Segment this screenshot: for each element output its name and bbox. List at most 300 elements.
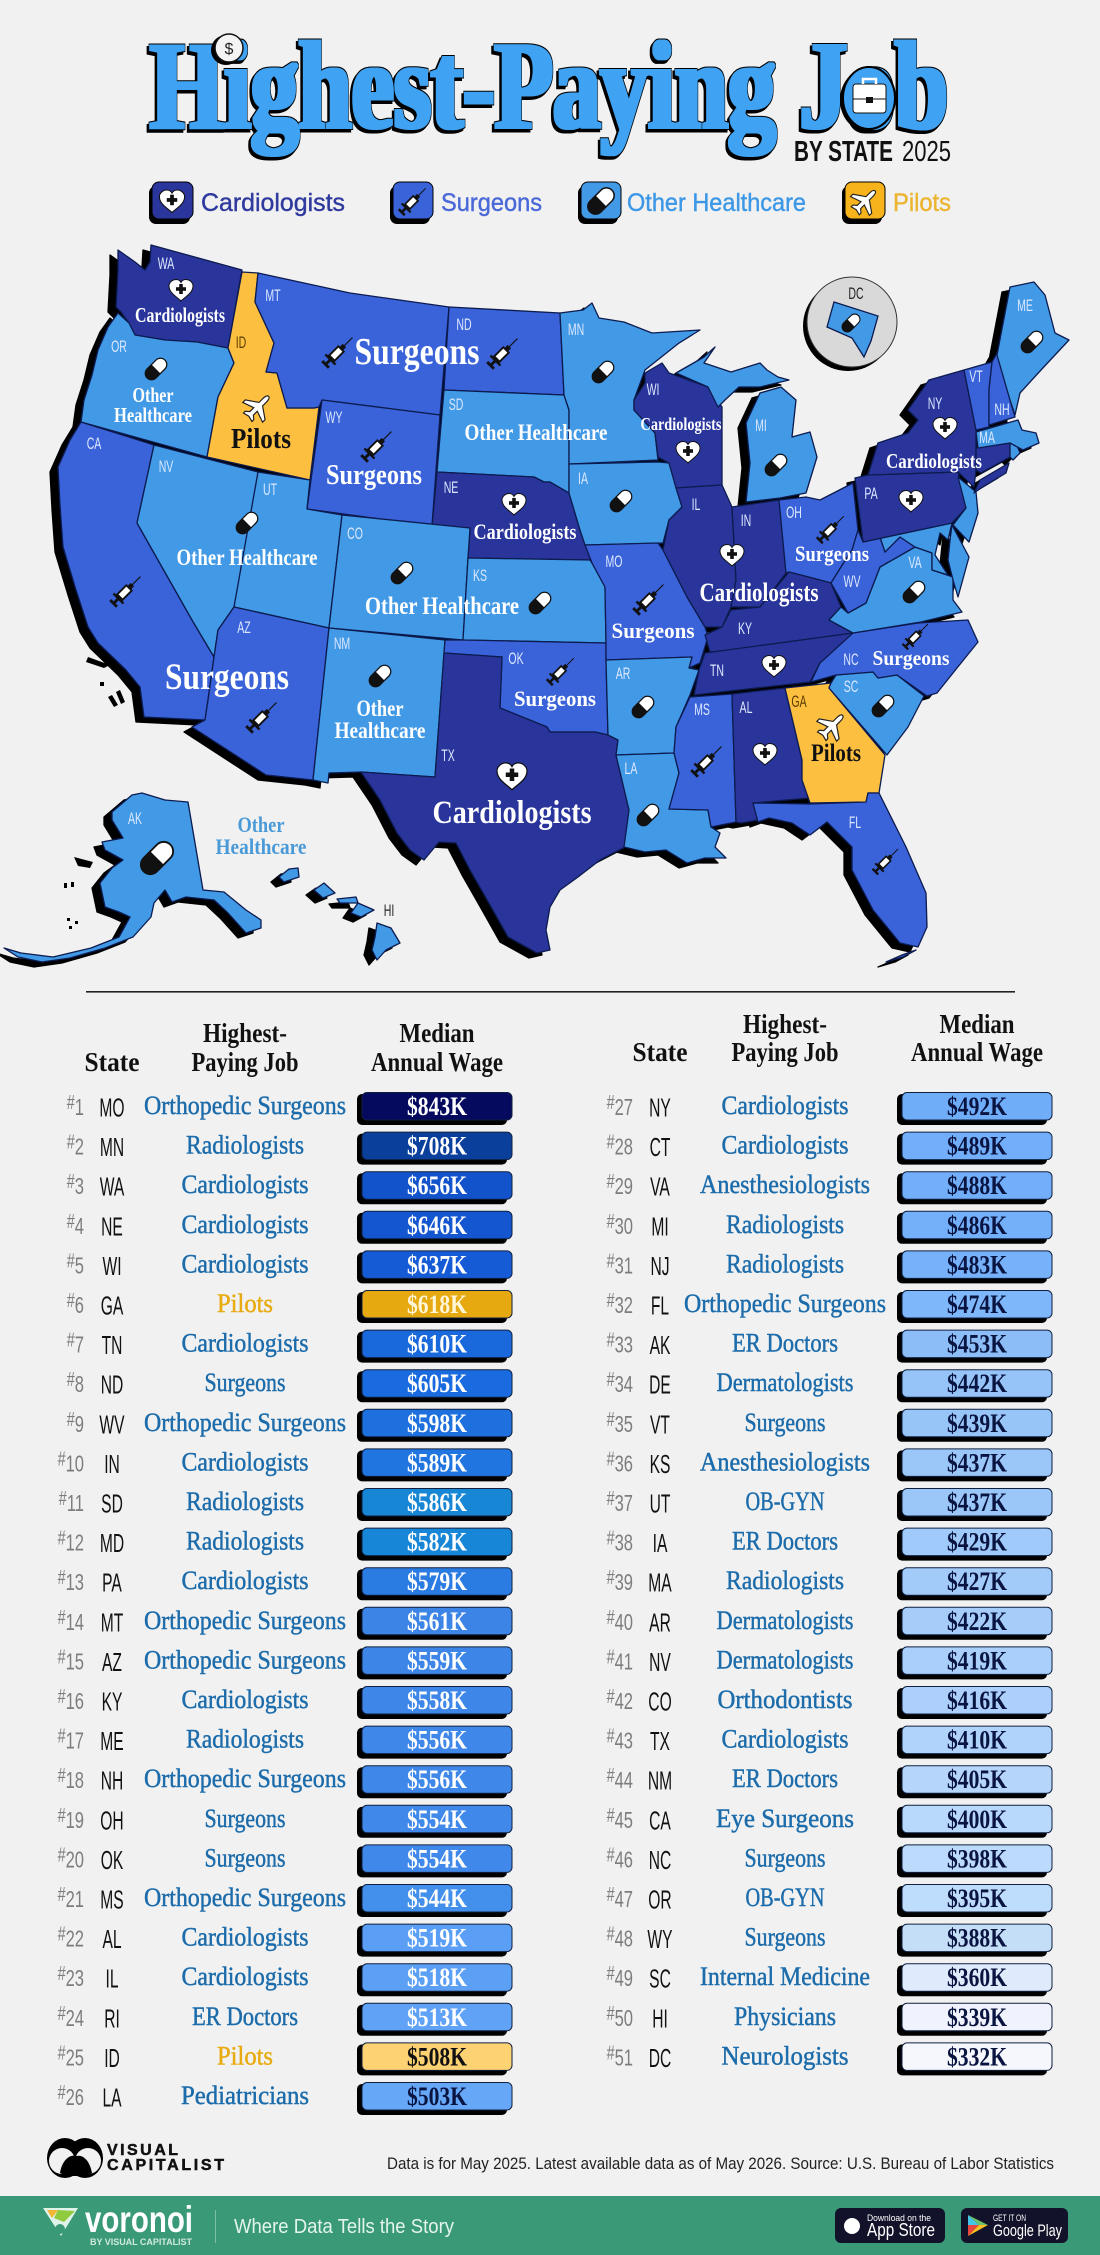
row 1 [67,1091,512,1125]
row 2: MN [100,1133,124,1162]
table headers: left: Paying Job [192,1047,298,1077]
row 7 [67,1328,512,1363]
row 42: # [607,1685,615,1708]
map job labels: Other Healthcare [365,593,519,620]
table headers: right: State [632,1037,688,1067]
row 12: # [58,1526,66,1549]
row 21: # [58,1883,66,1906]
row 5: $637K [407,1250,468,1279]
map state abbreviations: CO [347,523,363,543]
state: CA [58,422,214,720]
row 51 [607,2041,1052,2075]
row 5: 5 [75,1254,84,1279]
state: SC [829,672,924,755]
legend [149,182,951,224]
row 33: # [607,1328,615,1351]
row 36: Anesthesiologists [700,1447,870,1476]
row 23: # [58,1962,66,1985]
row 24: $513K [407,2003,468,2032]
map job labels: Pilots [811,740,861,767]
map state abbreviations: CA [87,433,102,453]
row 49: # [607,1962,615,1985]
row 35: # [607,1407,615,1430]
legend item: Surgeons: Surgeons [441,189,542,217]
row 40: AR [649,1608,671,1637]
row 18: NH [101,1767,123,1796]
map job labels: Surgeons [165,657,289,698]
row 1: MO [99,1093,125,1123]
row 30: $486K [947,1211,1008,1240]
row 5: Cardiologists [182,1249,308,1278]
table headers: left [84,1018,503,1077]
row 50: Physicians [734,2002,836,2031]
row 49: $360K [947,1963,1008,1992]
map job labels: Pilots [231,424,291,455]
row 31: Radiologists [726,1249,844,1278]
row 41: # [607,1645,615,1668]
row 8: # [67,1368,75,1391]
state: MO [585,543,708,668]
row 22: Cardiologists [182,1923,308,1952]
map state abbreviations: AL [740,697,753,717]
row 6 [67,1289,512,1323]
row 16: 16 [66,1689,84,1715]
map job labels: Cardiologists [700,578,818,607]
row 20: 20 [66,1848,84,1873]
table headers: left: State [84,1047,140,1077]
row 47 [607,1883,1052,1917]
row 4: Cardiologists [182,1210,308,1239]
row 27: Cardiologists [722,1091,848,1120]
map state abbreviations: IN [741,510,751,530]
state: WV [831,530,915,613]
row 30 [607,1209,1052,1244]
map state abbreviations: KY [738,618,752,638]
icon: dollar coin: $ [225,41,234,58]
row 1: 1 [75,1095,84,1121]
map of U.S. states [4,245,1069,962]
row 31: $483K [947,1250,1008,1279]
row 35 [607,1407,1052,1442]
row 20: # [58,1843,66,1866]
legend item: Pilots: Pilots [893,189,951,217]
row 26: # [58,2081,66,2104]
row 4: 4 [75,1214,84,1240]
row 42: 42 [615,1689,633,1715]
row 51: DC [649,2044,671,2073]
legend item: Other Healthcare: Other Healthcare [627,189,806,217]
row 19: $554K [407,1805,468,1834]
row 33: AK [650,1331,671,1360]
row 49: SC [649,1965,671,1994]
state: MI upper and lower [676,347,817,502]
row 4: $646K [407,1211,468,1240]
state: CT [976,443,1010,473]
map job labels: Surgeons [326,460,422,491]
table headers: right: Highest- [743,1009,827,1039]
row 9 [67,1407,512,1442]
tagline: Where Data Tells the Story [234,2216,454,2238]
row 44: NM [648,1767,672,1796]
row 47: 47 [615,1887,633,1913]
row 17: ME [100,1727,124,1756]
map state abbreviations: TX [441,745,455,765]
row 29: # [607,1170,615,1193]
row 1: Orthopedic Surgeons [144,1091,346,1120]
row 31: 31 [615,1254,633,1279]
row 17: 17 [66,1729,84,1754]
row 41: 41 [615,1650,633,1675]
row 11: Radiologists [186,1487,304,1516]
row 43: 43 [615,1729,633,1754]
table headers: right: Paying Job [732,1037,838,1067]
row 43: $410K [947,1726,1008,1755]
row 41 [607,1645,1052,1679]
row 45 [607,1803,1052,1838]
state: MA [976,420,1039,450]
state: NM [313,628,445,783]
row 35: 35 [615,1412,633,1438]
legend item: Other Healthcare [578,182,806,224]
row 22: $519K [407,1924,468,1953]
row 39: # [607,1566,615,1589]
row 40: # [607,1605,615,1628]
map job labels: Cardiologists [474,519,577,544]
row 37: # [607,1487,615,1510]
state: MN [560,303,700,464]
map state abbreviations: IL [692,494,700,514]
state: SD [437,390,569,493]
icon: briefcase [840,67,895,131]
row 6: Pilots [217,1289,273,1318]
map state abbreviations: MN [568,319,584,339]
row 27: 27 [615,1095,633,1121]
row 14 [58,1605,512,1640]
row 21: MS [100,1885,124,1915]
row 2: 2 [75,1135,84,1160]
row 34: # [607,1368,615,1391]
row 10: Cardiologists [182,1447,308,1476]
row 40: Dermatologists [716,1606,854,1635]
row 17: Radiologists [186,1725,304,1754]
row 7: Cardiologists [182,1329,308,1358]
row 34: Dermatologists [716,1368,854,1397]
state: RI [1010,443,1020,460]
row 48: 48 [615,1927,633,1952]
map job labels: Cardiologists [135,303,225,327]
row 17 [58,1724,512,1759]
row 11: 11 [67,1491,84,1517]
row 13: # [58,1566,66,1589]
map job labels: Surgeons [514,686,596,711]
map job labels: Other Healthcare [176,545,318,570]
row 21: 21 [66,1887,84,1913]
row 24: ER Doctors [192,2002,298,2031]
row 51: Neurologists [722,2041,848,2070]
row 37: $437K [947,1488,1008,1517]
map job labels: Other [132,383,174,407]
row 45: # [607,1803,615,1826]
App Store badge: App Store [867,2220,935,2240]
row 51: $332K [947,2042,1008,2071]
row 2: $708K [407,1132,468,1161]
row 45: 45 [615,1808,633,1834]
map state abbreviations: AZ [237,617,251,637]
row 7: 7 [75,1333,84,1358]
row 43 [607,1724,1052,1759]
map state abbreviations: SD [449,394,463,414]
row 32: 32 [615,1293,633,1319]
row 2 [67,1130,512,1165]
map state abbreviations: MS [694,699,710,719]
map state abbreviations: NM [334,633,350,653]
state: AR [606,657,699,755]
state: MD [863,523,952,575]
row 27: $492K [947,1092,1008,1121]
row 26: 26 [66,2085,84,2111]
row 39: $427K [947,1567,1008,1596]
row 35: $439K [947,1409,1008,1438]
row 14: $561K [407,1607,468,1636]
row 31: NJ [650,1252,670,1281]
map state abbreviations: WI [647,379,659,399]
map job labels: Healthcare [216,834,307,859]
map icons: hearts [169,280,957,790]
row 13: $579K [407,1567,468,1596]
row 16: $558K [407,1686,468,1715]
row 9: $598K [407,1409,468,1438]
state: IL [663,485,736,627]
state: KY [705,572,853,652]
row 4: # [67,1209,75,1232]
row 24: # [58,2001,66,2024]
table headers: right: Annual Wage [911,1037,1043,1067]
row 21: Orthopedic Surgeons [144,1883,346,1912]
row 6: GA [101,1291,124,1321]
row 14: MT [101,1608,123,1637]
map state abbreviations: OK [508,648,524,668]
row 43: # [607,1724,615,1747]
row 15 [58,1645,512,1679]
row 19: 19 [66,1808,84,1834]
row 36 [607,1447,1052,1481]
map icons: planes [238,386,853,746]
row 5 [67,1249,512,1283]
state: VA [829,547,962,633]
row 42: CO [648,1687,672,1717]
row 26: $503K [407,2082,468,2111]
row 24: RI [104,2004,120,2033]
map state abbreviations: FL [849,812,861,832]
row 8: $605K [407,1369,468,1398]
row 33: ER Doctors [732,1329,838,1358]
state: NV [137,445,258,657]
row 24 [58,2001,512,2036]
state: GA [785,683,885,803]
row 34 [607,1368,1052,1402]
map state abbreviations [87,253,1033,920]
row 51: # [607,2041,615,2064]
logo: Visual Capitalist [47,2138,224,2178]
row 11 [59,1487,512,1521]
row 37 [607,1487,1052,1521]
table: right column [607,1091,1052,2075]
row 3: # [67,1170,75,1193]
map state abbreviations: IA [578,468,588,488]
row 33: 33 [615,1333,633,1358]
row 29: VA [650,1173,670,1202]
row 16: KY [102,1687,122,1717]
state: ID [207,272,319,480]
row 49: 49 [615,1967,633,1992]
row 1: $843K [407,1092,468,1121]
map state abbreviations: MI [755,415,767,435]
row 14: Orthopedic Surgeons [144,1606,346,1635]
row 38: IA [653,1529,668,1558]
row 28: 28 [615,1135,633,1160]
row 34: 34 [615,1373,633,1398]
state: OK [444,640,608,735]
row 36: KS [650,1450,670,1479]
table headers: left: Highest- [203,1018,287,1048]
map state abbreviations: OR [111,336,127,356]
map job labels: Surgeons [872,646,950,670]
map state abbreviations: AK [128,808,142,828]
map state abbreviations: TN [710,660,724,680]
row 39 [607,1566,1052,1600]
subtitle: BY STATE [794,136,893,168]
row 9: 9 [75,1412,84,1438]
state: FL with keys [753,793,927,962]
row 28: $489K [947,1132,1008,1161]
state: TX [361,653,629,953]
row 45: CA [649,1806,671,1835]
row 25: Pilots [217,2041,273,2070]
map state abbreviations: NV [159,456,174,476]
row 13: PA [102,1569,122,1598]
row 42: Orthodontists [718,1685,852,1714]
row 9: # [67,1407,75,1430]
map state abbreviations: NH [994,399,1010,419]
row 43: TX [650,1727,670,1756]
logo: Visual Capitalist: VISUAL [107,2142,178,2159]
state: CO [329,515,470,640]
row 24: 24 [66,2006,84,2032]
row 26: Pediatricians [181,2081,309,2110]
row 21 [58,1883,512,1917]
row 28: CT [650,1133,670,1162]
row 33 [607,1328,1052,1363]
row 30: 30 [615,1214,633,1240]
row 8: 8 [75,1373,84,1398]
map state abbreviations: UT [263,479,277,499]
row 14: 14 [66,1610,84,1636]
row 47: $395K [947,1884,1008,1913]
map job labels: Surgeons [612,618,695,643]
row 16 [58,1685,512,1719]
row 22: 22 [66,1927,84,1952]
row 46: $398K [947,1844,1008,1873]
legend item: Cardiologists [149,182,345,224]
row 6: # [67,1289,75,1312]
state: MT [255,273,449,415]
row 8 [67,1368,512,1402]
Google Play badge: Google Play [993,2221,1062,2240]
row 22: AL [102,1925,122,1954]
row 41: $419K [947,1646,1008,1675]
row 46: NC [649,1846,671,1875]
map state abbreviations: PA [864,483,878,503]
row 49: Internal Medicine [700,1962,870,1991]
row 36: $437K [947,1448,1008,1477]
state: AZ [192,607,329,780]
map state abbreviations: LA [625,758,638,778]
map state abbreviations: NC [843,649,859,669]
state: NC [811,620,978,696]
map job labels: Other [238,812,285,837]
DC inset circle: DC [848,283,864,303]
row 6: 6 [75,1293,84,1319]
state: AK [4,793,261,962]
map job labels: Other [356,696,404,721]
row 10 [58,1447,512,1481]
row 44: ER Doctors [732,1764,838,1793]
row 15: AZ [102,1648,122,1677]
row 41: NV [649,1648,671,1677]
map state abbreviations: MO [606,551,622,571]
row 12: $582K [407,1528,468,1557]
map state abbreviations: WV [844,571,861,591]
row 32 [607,1289,1052,1323]
footer band [0,2196,1100,2255]
row 32: # [607,1289,615,1312]
map state abbreviations: MT [265,285,281,305]
map state abbreviations: OH [786,502,802,522]
row 10: 10 [66,1452,84,1477]
voronoi logo: BY VISUAL CAPITALIST [90,2237,192,2247]
state: NE [432,472,592,563]
row 40: 40 [615,1610,633,1636]
row 13 [58,1566,512,1600]
row 50: $339K [947,2003,1008,2032]
row 37: 37 [615,1491,633,1517]
row 50 [607,2001,1052,2036]
map icons: syringes [108,333,932,877]
row 23: Cardiologists [182,1962,308,1991]
row 3: 3 [75,1175,84,1200]
row 48: # [607,1922,615,1945]
row 38: 38 [615,1531,633,1556]
row 11: SD [101,1489,123,1519]
row 19: Surgeons [204,1804,286,1833]
row 50: 50 [615,2006,633,2032]
row 29: $488K [947,1171,1008,1200]
Google Play badge: GET IT ON [993,2213,1026,2223]
state: UT [234,472,342,628]
row 38: # [607,1526,615,1549]
row 48 [607,1922,1052,1957]
row 4 [67,1209,512,1244]
row 27 [607,1091,1052,1125]
row 17: # [58,1724,66,1747]
row 38 [607,1526,1052,1561]
voronoi logo [43,2199,193,2247]
row 40: $422K [947,1607,1008,1636]
map state abbreviations: AR [616,663,630,683]
state: DE and Delmarva [948,525,969,597]
state: VT [964,362,992,430]
row 25 [58,2041,512,2075]
